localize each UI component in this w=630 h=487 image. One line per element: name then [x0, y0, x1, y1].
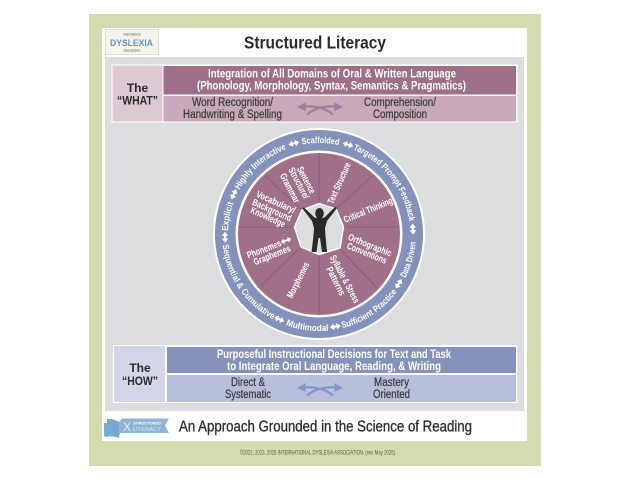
wedge labels: Vocabulary/ — [254, 189, 297, 216]
how label: “HOW” — [122, 374, 158, 388]
wedge labels — [246, 161, 395, 305]
wheel: Sequential & Cumulative — [222, 244, 274, 319]
wedge labels: Orthographic — [346, 232, 393, 259]
ring double arrows — [222, 139, 416, 331]
wedge labels: Conventions — [345, 241, 388, 267]
what lower band: Word Recognition/ — [192, 97, 274, 109]
what heading band: Integration of All Domains of Oral & Written Language — [208, 66, 456, 80]
icon: person with raised arms — [302, 207, 337, 252]
how lower band — [167, 375, 516, 402]
wheel: Scaffolded — [302, 136, 340, 145]
what lower band — [164, 96, 516, 122]
how lower band: Mastery — [374, 377, 409, 389]
wedge labels: Critical Thinking — [342, 196, 395, 226]
wedge labels: Patterns — [323, 265, 347, 298]
how lower band: Oriented — [373, 389, 410, 401]
how heading band: to Integrate Oral Language, Reading, & Writing — [227, 359, 441, 373]
logo: International Dyslexia Association: DYSLEXIA — [110, 38, 153, 49]
what heading band: (Phonology, Morphology, Syntax, Semantics & Pragmatics) — [197, 78, 466, 92]
hub — [294, 204, 344, 254]
how heading band: Purposeful Instructional Decisions for Text and Task — [217, 347, 451, 361]
title: Structured Literacy — [244, 32, 386, 52]
wheel: Targeted Prompt Feedback — [354, 144, 416, 222]
white card — [102, 28, 527, 441]
icon: structured literacy book banner: STRUCTURED — [133, 422, 161, 426]
wheel: Multimodal — [286, 319, 328, 332]
tagline: An Approach Grounded in the Science of Reading — [179, 418, 472, 436]
green background frame — [89, 14, 541, 466]
wedge labels: Text Structure — [326, 161, 354, 206]
wedge labels: Sentence — [294, 165, 317, 196]
wedge labels: Syllable & Stress — [327, 253, 362, 305]
logo: International Dyslexia Association: Association — [124, 48, 141, 52]
how label: The — [129, 361, 151, 375]
icon: crossing arrows — [297, 383, 343, 396]
wheel — [213, 128, 425, 340]
logo: International Dyslexia Association: International — [124, 32, 141, 36]
wedge labels: Morphemes — [285, 260, 312, 300]
how label — [114, 346, 165, 402]
what label — [112, 66, 162, 122]
how heading band — [167, 347, 516, 373]
outer ring — [213, 128, 425, 340]
how lower band: Systematic — [225, 389, 271, 401]
how lower band: Direct & — [231, 377, 265, 389]
wheel: Highly Interactive — [234, 145, 286, 190]
panel: the how — [113, 345, 518, 403]
what label: “WHAT” — [117, 94, 158, 108]
copyright: ©2022, 2023, 2025 INTERNATIONAL DYSLEXIA ASSOCIATION. (rev. May 2025) — [240, 450, 395, 456]
what lower band: Comprehension/ — [364, 97, 437, 109]
wedge labels: Structure/ — [285, 166, 311, 201]
what heading band — [164, 66, 516, 94]
wheel disc — [238, 153, 400, 315]
what lower band: Handwriting & Spelling — [183, 109, 282, 121]
wedge labels: Background — [250, 197, 293, 224]
what lower band: Composition — [373, 109, 427, 121]
wheel: Explicit — [222, 202, 234, 230]
what label: The — [127, 81, 148, 95]
wedge labels: Knowledge — [249, 205, 287, 230]
wedge labels: Grammar — [277, 172, 302, 205]
icon: structured literacy book banner — [104, 418, 169, 438]
icon: crossing arrows — [297, 102, 343, 114]
wheel: Sufficient Practice — [342, 290, 396, 328]
panel: the what — [112, 64, 518, 122]
wedge labels: Graphemes — [252, 243, 292, 268]
wedge labels: Phonemes — [246, 238, 283, 261]
icon: structured literacy book banner: LITERACY — [133, 427, 161, 433]
wheel: Data Driven — [400, 242, 416, 278]
icon: structured literacy book banner: X — [123, 420, 131, 434]
gray content panel — [105, 57, 524, 411]
logo: International Dyslexia Association — [106, 30, 158, 54]
